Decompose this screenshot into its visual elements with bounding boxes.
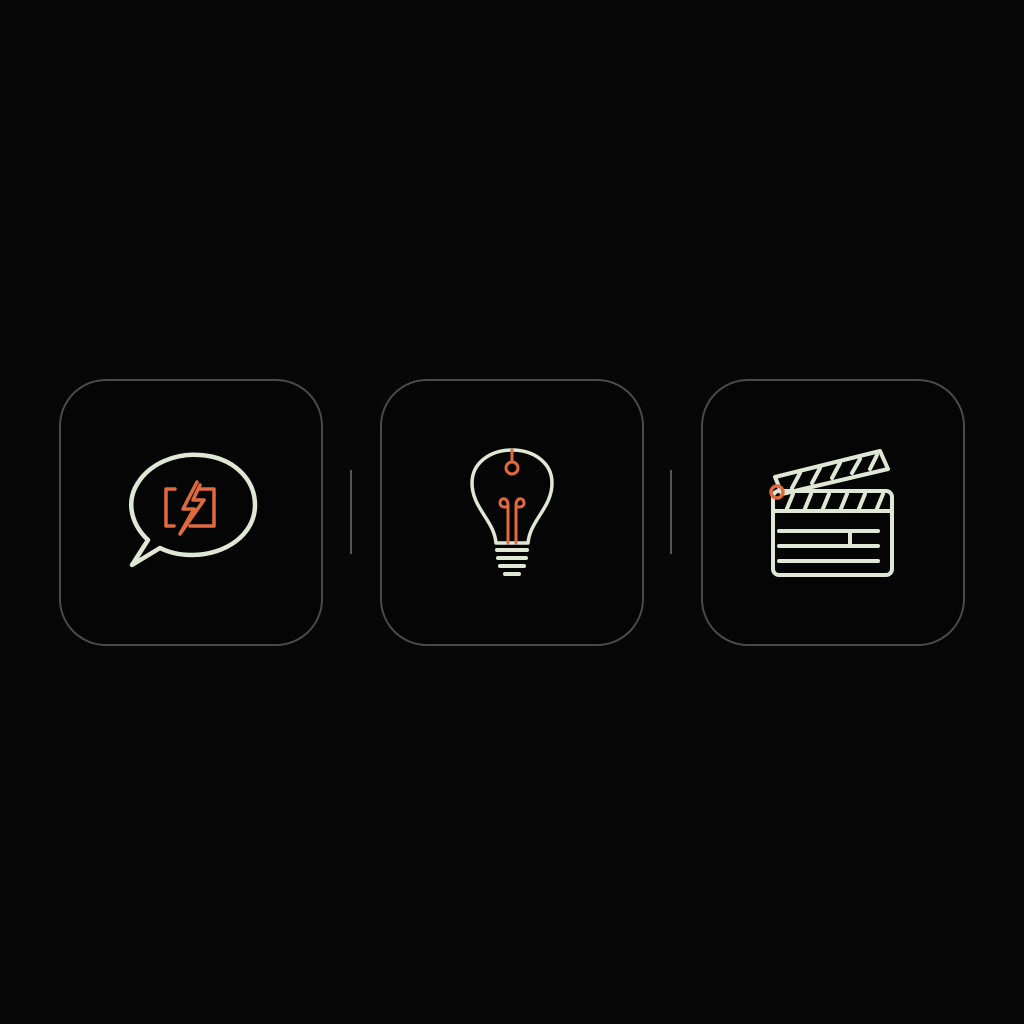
icon: light bulb	[472, 450, 552, 574]
icon: speech bubble with lightning	[131, 455, 255, 565]
icon: clapperboard	[771, 451, 892, 575]
divider 2	[670, 470, 672, 554]
panel: video tile	[702, 380, 964, 645]
divider 1	[350, 470, 352, 554]
panel: chat tile	[60, 380, 322, 645]
panel: idea tile	[381, 380, 643, 645]
